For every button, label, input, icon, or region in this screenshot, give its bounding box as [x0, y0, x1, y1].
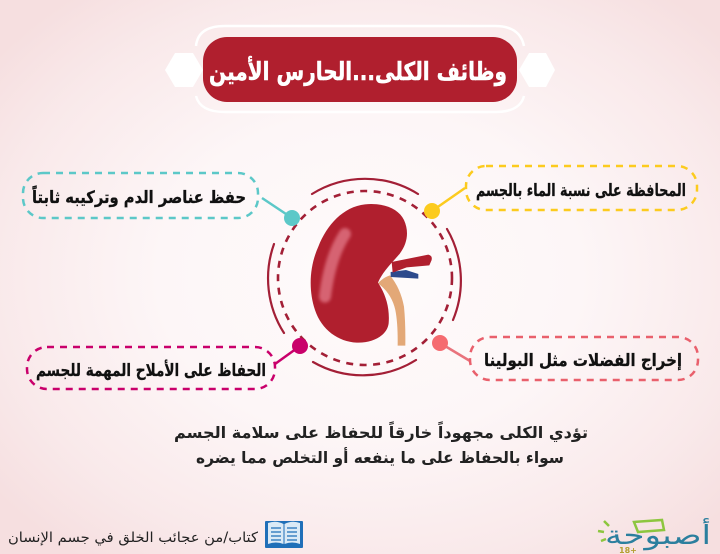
summary text: سواء بالحفاظ على ما ينفعه أو التخلص مما يضره [196, 447, 564, 467]
logo [598, 517, 711, 554]
callout: water balance [424, 166, 697, 219]
kidney body [311, 204, 407, 343]
source text: كتاب/من عجائب الخلق في جسم الإنسان [8, 530, 258, 546]
logo crown [634, 520, 664, 532]
title pill [203, 37, 517, 102]
outer arcs [268, 179, 461, 375]
icon: right hexagon [519, 53, 555, 87]
artery [392, 255, 432, 273]
dot [292, 338, 308, 354]
title outer ring [196, 26, 524, 112]
connector [432, 188, 465, 211]
dashed circle [278, 191, 452, 365]
connector [275, 346, 300, 364]
icon: left hexagon [165, 53, 203, 87]
dashed box [27, 347, 275, 389]
summary text [174, 420, 588, 467]
dashed box [470, 337, 698, 380]
callout: salts [27, 338, 308, 389]
logo rays [598, 521, 609, 541]
kidney diagram [268, 179, 461, 375]
connector [262, 198, 292, 218]
dot [424, 203, 440, 219]
icon: book [265, 521, 303, 548]
callout: blood composition [23, 173, 300, 226]
label: الحفاظ على الأملاح المهمة للجسم [36, 360, 266, 381]
summary text: تؤدي الكلى مجهوداً خارقاً للحفاظ على سلامة الجسم [174, 420, 588, 443]
kidney illustration [311, 204, 432, 346]
callout: waste excretion [432, 335, 698, 380]
label: حفظ عناصر الدم وتركيبه ثابتاً [32, 184, 246, 208]
dot [284, 210, 300, 226]
vein [391, 270, 418, 279]
label: إخراج الفضلات مثل البولينا [484, 351, 682, 371]
title banner [165, 26, 555, 112]
dashed box [23, 173, 258, 218]
dot [432, 335, 448, 351]
source citation [8, 521, 303, 548]
ureter [378, 275, 405, 346]
title text: وظائف الكلى...الحارس الأمين [209, 56, 507, 87]
kidney highlight [325, 234, 345, 297]
dashed box [466, 166, 697, 210]
logo wordmark: أصبوحة [605, 517, 711, 551]
connector [440, 343, 470, 361]
